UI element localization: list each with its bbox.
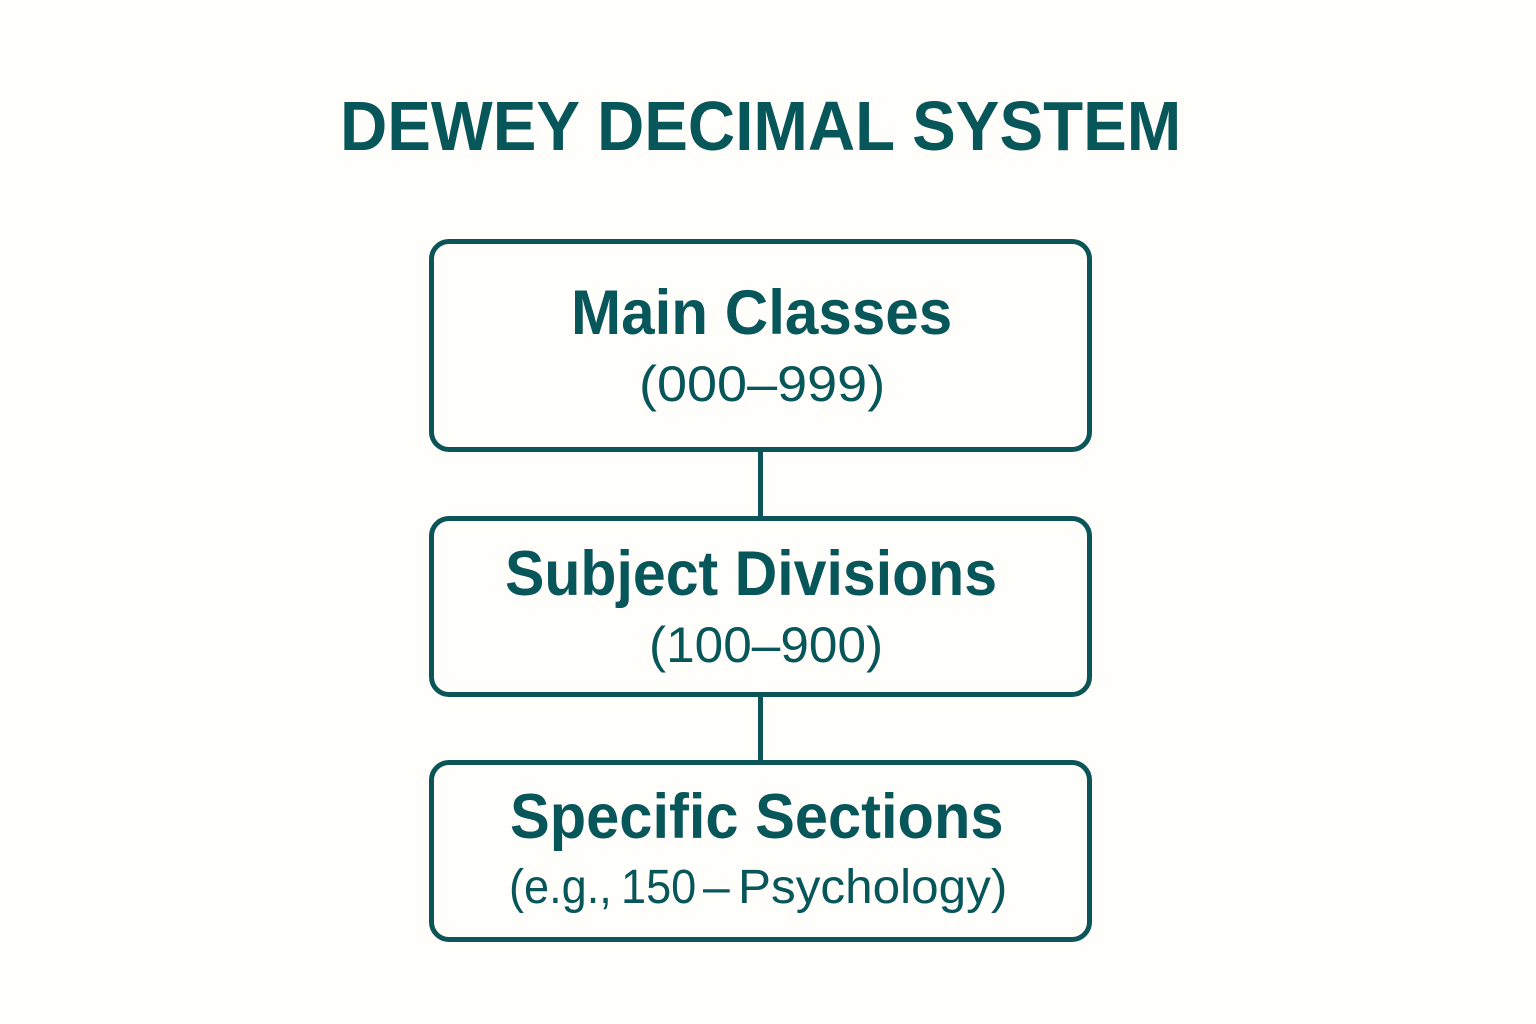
heading: subject divisions: Subject Divisions [505, 539, 997, 609]
heading: specific sections: Specific Sections [510, 782, 1004, 852]
box: specific sections [429, 760, 1092, 942]
text: specific sections example: (e.g., [509, 861, 612, 914]
connector: subject divisions to specific sections [758, 695, 763, 763]
text: main classes range: (000–999) [639, 356, 885, 412]
heading: main classes: Main Classes [571, 278, 952, 348]
box: subject divisions [429, 516, 1092, 697]
text: specific sections example: 150 [621, 861, 696, 914]
text: subject divisions range: (100–900) [649, 617, 883, 673]
text: specific sections example: – [703, 861, 730, 914]
box: main classes [429, 239, 1092, 452]
title: DEWEY DECIMAL SYSTEM [340, 87, 1181, 165]
connector: main classes to subject divisions [758, 450, 763, 519]
text: specific sections example: Psychology) [738, 861, 1007, 914]
text: specific sections example [509, 861, 1007, 914]
